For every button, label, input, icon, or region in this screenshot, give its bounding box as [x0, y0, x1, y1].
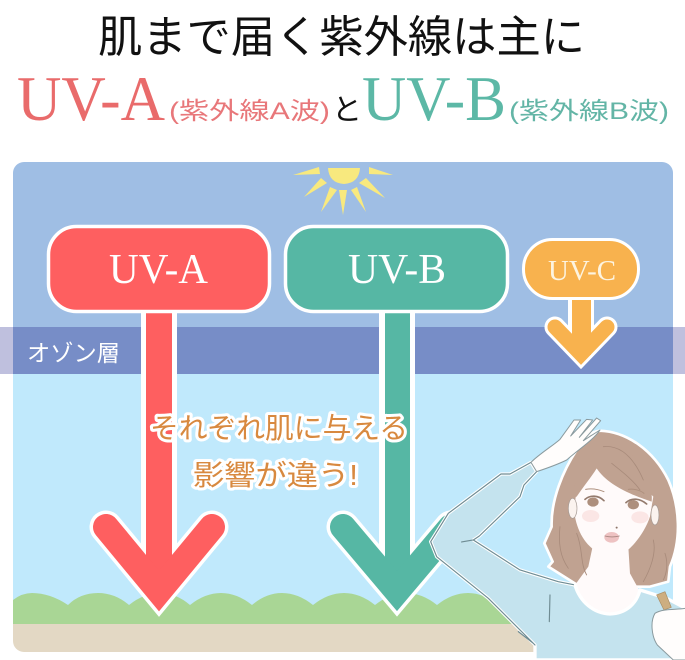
- ground: [13, 624, 534, 652]
- illustration: woman shading her eyes: [431, 418, 685, 660]
- ear left: [568, 498, 577, 518]
- title line 1: 肌まで届く紫外線は主に: [98, 13, 585, 62]
- ozone layer band: [13, 327, 673, 374]
- title: connector: と: [332, 94, 362, 127]
- label box: UV-A: UV-A: [109, 247, 209, 293]
- lower sky: [13, 374, 673, 626]
- hand on strap: [652, 608, 685, 660]
- neck: [575, 543, 640, 615]
- label box: UV-B: [286, 226, 508, 312]
- arrow: UV-A: [48, 226, 270, 591]
- arrow: UV-B: [286, 226, 508, 591]
- collar: [575, 585, 640, 614]
- hair strands: [559, 447, 667, 582]
- upper sky: [13, 162, 673, 328]
- panel: atmosphere scene: [13, 162, 673, 652]
- label box: UV-C: UV-C: [548, 255, 616, 287]
- hair back: [544, 431, 678, 587]
- label box: UV-B: UV-B: [348, 247, 446, 293]
- sweater outline: [431, 462, 575, 645]
- arrow: UV-C: [524, 240, 638, 355]
- raised hand: [531, 418, 601, 472]
- ozone layer label: オゾン層: [27, 340, 120, 366]
- title: [17, 13, 669, 134]
- callout: differing effects: [150, 413, 408, 492]
- cheeks: [582, 510, 649, 523]
- face: [574, 468, 653, 559]
- label box: UV-A: [48, 226, 270, 312]
- bag strap: [657, 592, 671, 610]
- nose and mouth: [604, 527, 619, 543]
- title: UV-B note: (紫外線B波): [509, 98, 669, 125]
- bangs: [571, 445, 652, 502]
- ear right: [651, 505, 659, 525]
- ozone band outer edge: [0, 327, 685, 374]
- title: UV-B: UV-B: [362, 64, 506, 134]
- title: UV-A: UV-A: [17, 64, 165, 134]
- eyes: [585, 489, 647, 509]
- icon: sun: [293, 167, 393, 215]
- callout line 2: 影響が違う!: [193, 460, 358, 492]
- sweater: [431, 462, 685, 660]
- sweater halo: [431, 462, 685, 660]
- grass: [13, 593, 512, 624]
- title: UV-A note: (紫外線A波): [169, 98, 330, 125]
- callout line 1: それぞれ肌に与える: [150, 413, 408, 445]
